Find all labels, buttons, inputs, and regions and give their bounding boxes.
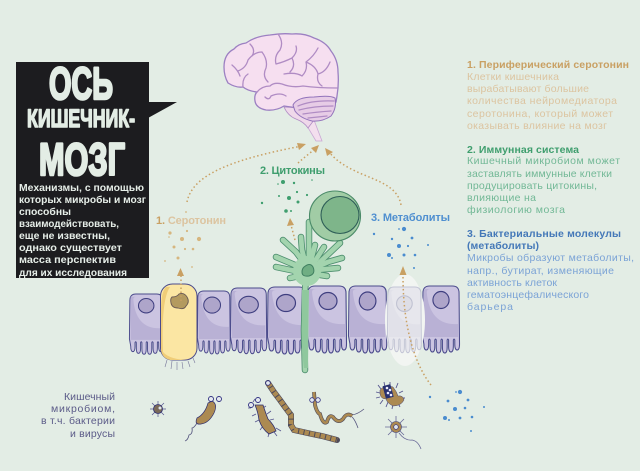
right text: peripheral serotonin: 1. Периферический серотонин [467,59,629,71]
cell 5 [268,287,306,354]
right text: bacterial molecules: барьера [467,301,513,313]
cell 6 [308,286,346,353]
cell 4 [230,288,267,354]
intro text block: для их исследования [19,267,127,279]
right text: peripheral serotonin: Клетки кишечника [467,71,559,83]
label: 2. Цитокины: 2. Цитокины [260,165,325,177]
caption: microbiome: в т.ч. бактерии [41,415,115,427]
right text: immune system: 2. Иммунная система [467,144,579,156]
intro text block: которых микробы и мозг [19,194,147,206]
caption: microbiome [41,391,115,440]
yellow serotonin cell [160,284,197,370]
intro text block: еще не известны, [19,230,110,242]
right text: immune system: заставлять иммунные клетки [467,168,612,180]
right text: bacterial molecules: (метаболиты) [467,240,539,252]
intro text block: способны [19,206,71,218]
caption: microbiome: микробиом, [51,403,115,415]
microbe: spiral [310,392,364,428]
arrow: metabolites crossing barrier [400,266,431,385]
label: 1. Серотонин: 1. Серотонин [156,215,226,227]
microbe: hairy blob with viruses [376,382,405,409]
right text: peripheral serotonin: оказывать влияние на мозг [467,120,607,132]
microbe: flagellated rod [185,396,222,441]
right text: bacterial molecules: 3. Бактериальные молекулы [467,228,621,240]
title panel: black speech box [16,58,177,279]
cytokine particles [261,179,313,213]
intro text block [19,182,147,279]
epithelial cell row [129,274,460,370]
right text: bacterial molecules [467,228,634,313]
arrow: metabolites to brain [325,148,401,205]
right text: bacterial molecules: Микробы образуют метаболиты, [467,252,634,264]
right text: immune system: Кишечный микробиом может [467,155,620,167]
heading: КИШЕЧНИК-: КИШЕЧНИК- [27,105,135,133]
microbe: bead chain [266,381,337,440]
metabolite particles near microbes [429,390,485,432]
metabolite particles [373,227,429,269]
right text: bacterial molecules: гематоэнцефалического [467,289,589,301]
cell 3 [197,291,230,354]
cell 7 [348,286,387,353]
label: 3. Метаболиты: 3. Метаболиты [371,212,450,224]
microbe: round flagellated [385,416,421,449]
intro text block: однако существует [19,242,122,254]
cell 9 [422,286,460,353]
cell 1 [129,294,163,354]
right text: peripheral serotonin: количества нейромедиатора [467,95,617,107]
microbe: hairy rod [248,398,281,437]
right text: peripheral serotonin: серотонина, который может [467,108,613,120]
right text: peripheral serotonin: вырабатывают большие [467,83,589,95]
caption: microbiome: Кишечный [64,391,115,403]
arrow: serotonin leaving yellow cell [177,268,184,301]
arrow: cytokines to brain [298,145,319,163]
brain illustration [224,34,338,141]
intro text block: взаимодействовать, [19,218,119,230]
right text: peripheral serotonin [467,59,629,132]
caption: microbiome: и вирусы [70,428,115,440]
immune cell: large lymphocyte [310,191,360,241]
heading: МОЗГ: МОЗГ [39,134,125,185]
intro text block: масса перспектив [19,254,117,266]
intro text block: Механизмы, с помощью [19,182,144,194]
right text: immune system: физиологию мозга [467,204,565,216]
faded cell with glow [385,274,425,366]
right text: immune system [467,144,620,216]
right text: immune system: продуцировать цитокины, [467,180,597,192]
heading: ОСЬ: ОСЬ [49,58,113,109]
right text: bacterial molecules: напр., бутират, изменяющие [467,265,614,277]
right text: immune system: влияющие на [467,192,536,204]
arrow: cytokines leaving dendritic cell [287,218,295,240]
serotonin particles [164,211,201,268]
microbe: small virus [150,401,166,417]
arrow: serotonin to brain [187,143,306,202]
right text: bacterial molecules: активность клеток [467,277,557,289]
immune cell: dendritic cell with stem [276,222,342,370]
